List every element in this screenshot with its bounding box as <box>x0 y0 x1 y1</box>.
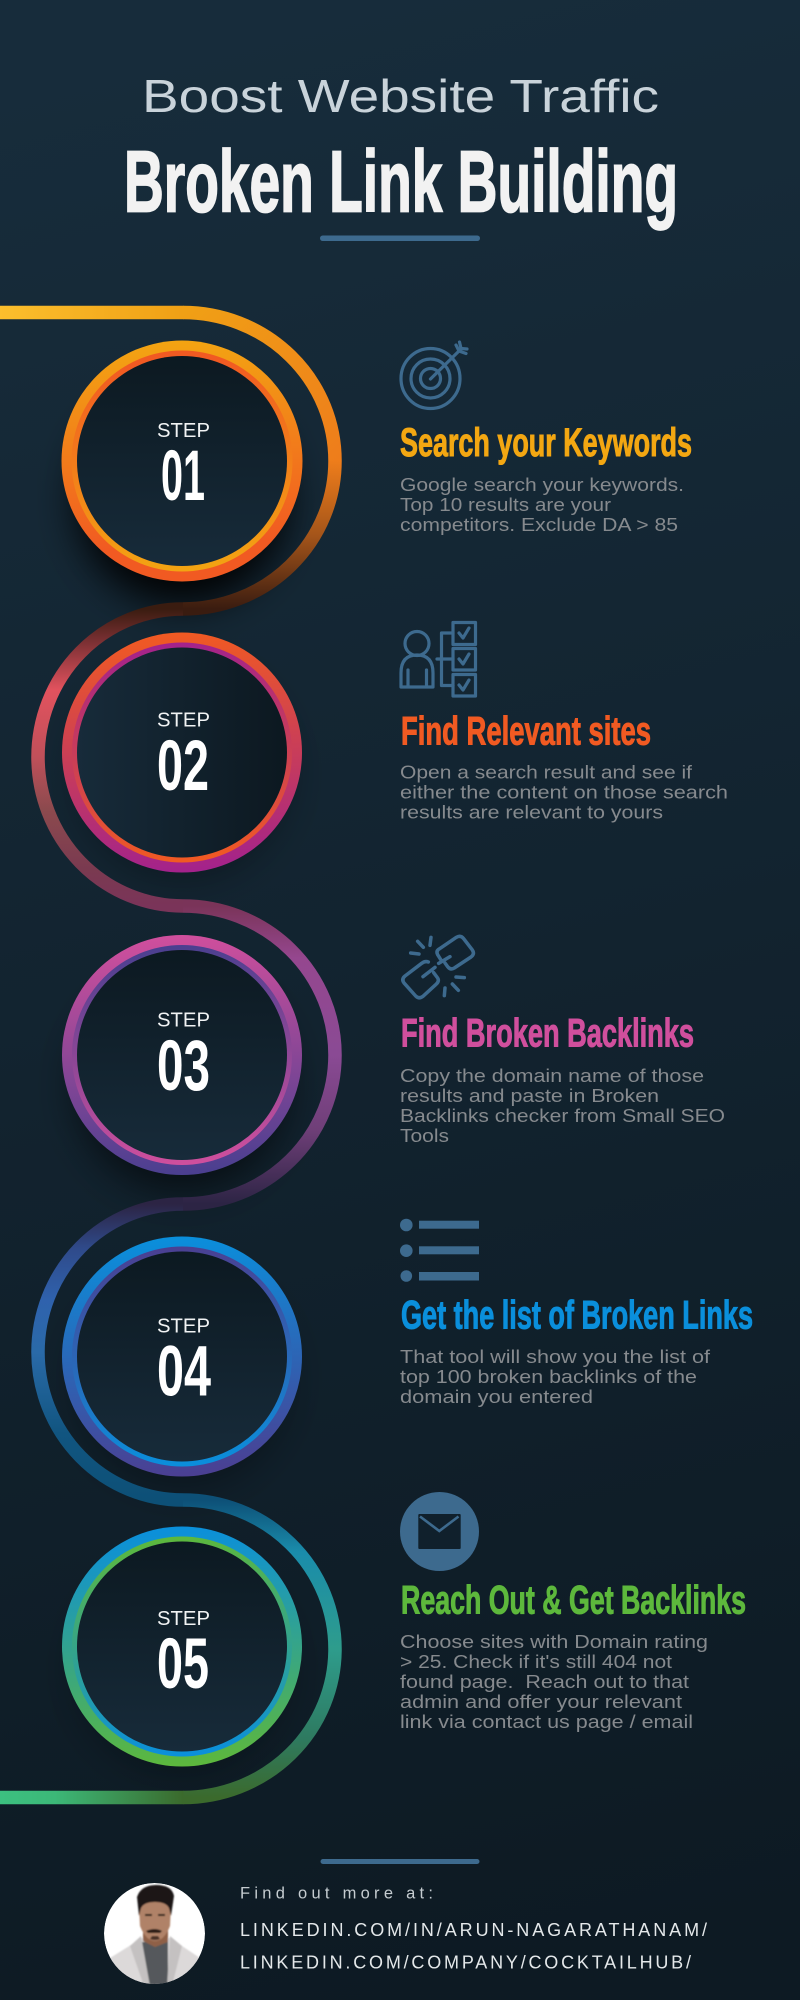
body text: either the content on those search <box>400 782 728 802</box>
step 02 circle: 02 <box>157 727 209 806</box>
step 3 content <box>400 936 725 1146</box>
body text: admin and offer your relevant <box>400 1691 682 1712</box>
step 02 circle <box>62 632 302 872</box>
step 04 circle: 04 <box>157 1332 211 1412</box>
winding gradient path <box>0 312 335 1798</box>
step 5 content <box>400 1492 746 1732</box>
body text: Open a search result and see if <box>400 762 693 782</box>
body text: Choose sites with Domain rating <box>400 1631 708 1652</box>
footer text <box>240 1884 707 1972</box>
body text: results and paste in Broken <box>400 1085 659 1106</box>
title underline <box>320 236 480 241</box>
step 2 content <box>400 622 728 822</box>
step 04 circle <box>62 1236 302 1476</box>
step 1 content <box>400 342 692 535</box>
step 01 circle <box>62 340 302 582</box>
body text <box>400 1631 708 1732</box>
body text: results are relevant to yours <box>400 802 663 822</box>
body text: Backlinks checker from Small SEO <box>400 1105 725 1126</box>
body text: found page. Reach out to that <box>400 1671 689 1692</box>
avatar photo <box>104 1883 205 1990</box>
icon: list <box>400 1219 479 1282</box>
body text: top 100 broken backlinks of the <box>400 1366 697 1387</box>
step 03 circle <box>62 935 302 1175</box>
icon: target with arrow <box>401 342 467 408</box>
body text: Top 10 results are your <box>400 494 611 515</box>
step 01 circle: 01 <box>161 437 205 516</box>
body text: competitors. Exclude DA > 85 <box>400 514 678 535</box>
step 01 circle: STEP <box>157 420 210 442</box>
footer text: LINKEDIN.COM/IN/ARUN-NAGARATHANAM/ <box>240 1920 707 1940</box>
body text: link via contact us page / email <box>400 1711 693 1732</box>
step 04 circle: STEP <box>157 1316 210 1338</box>
heading: find relevant sites: Find Relevant sites <box>401 710 651 754</box>
body text <box>400 762 728 822</box>
body text: domain you entered <box>400 1386 593 1407</box>
body text: That tool will show you the list of <box>400 1346 711 1367</box>
body text: > 25. Check if it's still 404 not <box>400 1651 672 1672</box>
footer divider <box>320 1859 480 1864</box>
body text <box>400 1065 725 1146</box>
body text: Google search your keywords. <box>400 474 684 495</box>
body text: Copy the domain name of those <box>400 1065 704 1086</box>
footer text: Find out more at: <box>240 1884 433 1902</box>
body text <box>400 474 684 535</box>
footer text: LINKEDIN.COM/COMPANY/COCKTAILHUB/ <box>240 1952 691 1972</box>
icon: broken chain link <box>403 936 473 998</box>
body text <box>400 1346 711 1407</box>
header <box>124 70 678 241</box>
step 03 circle: 03 <box>157 1027 210 1106</box>
circle drop shadows <box>76 392 288 1774</box>
step 05 circle: STEP <box>157 1608 210 1630</box>
step 05 circle <box>62 1526 302 1766</box>
body text: Tools <box>400 1125 449 1146</box>
step 02 circle: STEP <box>157 710 210 732</box>
step 4 content <box>400 1219 753 1407</box>
icon: envelope <box>400 1492 479 1571</box>
step 05 circle: 05 <box>157 1625 209 1704</box>
step 03 circle: STEP <box>157 1010 210 1032</box>
icon: person with checklist <box>401 622 476 696</box>
subtitle: Boost Website Traffic <box>142 70 659 122</box>
